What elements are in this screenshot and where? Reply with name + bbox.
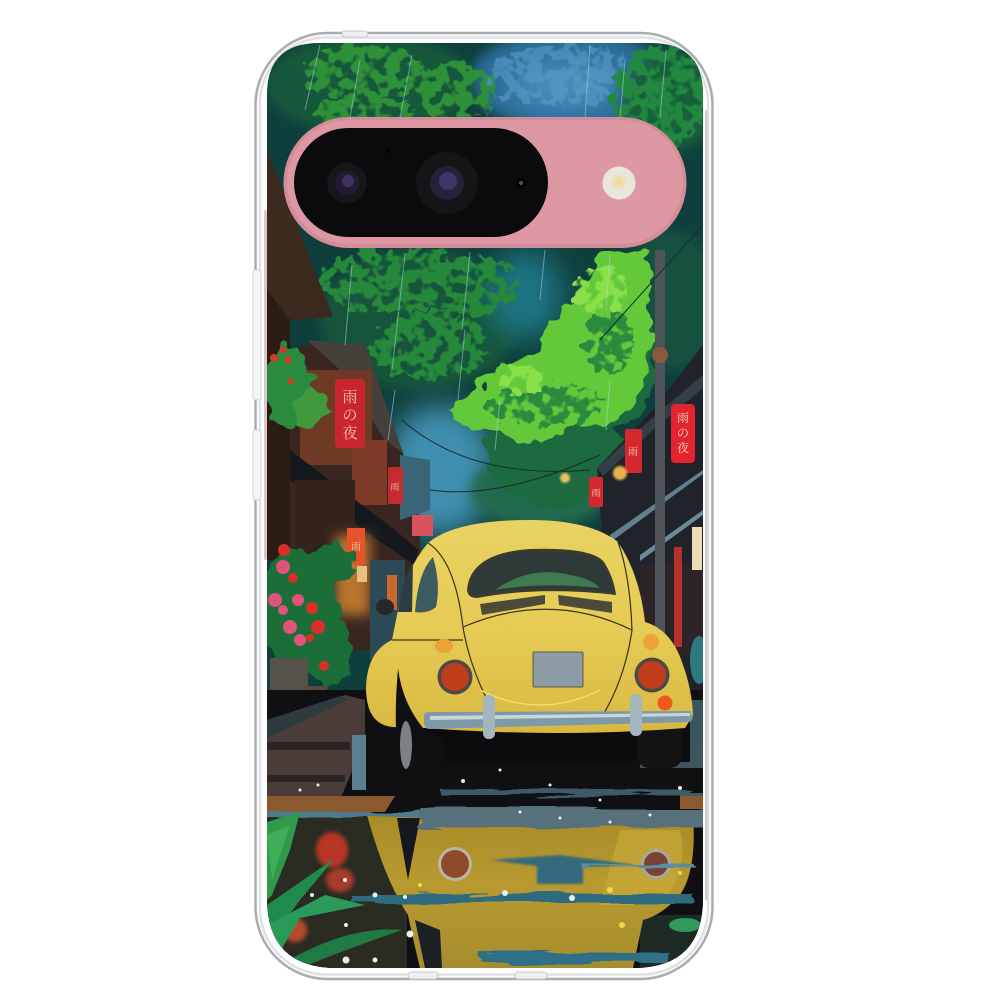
artwork	[262, 30, 720, 970]
pole lamp	[652, 347, 668, 363]
phone case	[253, 30, 720, 979]
bumper	[424, 711, 693, 729]
camera bar	[284, 117, 686, 248]
black lens pill	[294, 128, 548, 237]
distant blue tree texture	[485, 45, 645, 105]
reflection of car	[367, 815, 694, 968]
puddle streaks	[440, 746, 640, 760]
case pink edge	[264, 210, 267, 560]
rear window frame	[467, 549, 616, 598]
lantern right big: 夜	[677, 440, 689, 455]
lantern orange: 雨	[351, 541, 361, 553]
dark lower tree	[481, 326, 655, 510]
case top tab	[342, 31, 368, 37]
reflected taillight left	[438, 847, 472, 881]
right buildings	[560, 250, 708, 700]
lantern large left: の	[342, 408, 358, 424]
car	[366, 520, 693, 770]
dark wheel reflection	[397, 818, 420, 880]
foreground grass	[267, 812, 402, 968]
front side window	[398, 563, 413, 612]
wheel arch and left tyre	[396, 668, 443, 770]
case right edge	[705, 110, 708, 900]
sensor dots	[386, 149, 526, 188]
window reflection	[495, 572, 600, 590]
hanging white sign	[692, 527, 702, 570]
sidewalk	[267, 695, 365, 800]
lantern right big: の	[677, 426, 689, 440]
case left buttons	[253, 270, 261, 500]
left lanterns	[335, 379, 433, 582]
tail light left	[438, 660, 472, 694]
under-car shadow	[400, 728, 690, 762]
car body	[366, 520, 693, 733]
lens left	[327, 163, 367, 203]
left vine	[263, 345, 330, 426]
mid foliage	[320, 248, 520, 379]
wooden planter	[270, 658, 308, 690]
case inner bevel	[260, 38, 708, 974]
lens right	[416, 152, 478, 214]
lantern large left: 雨	[342, 389, 358, 406]
case bottom tabs	[408, 972, 547, 979]
lantern large left: 夜	[342, 425, 358, 442]
lantern small left	[388, 467, 403, 504]
red sign	[674, 547, 682, 647]
reflection background	[267, 815, 703, 968]
reflected taillight right	[641, 849, 671, 879]
lantern small left: 雨	[390, 482, 400, 492]
water droplets	[298, 768, 682, 964]
indicators	[435, 639, 453, 653]
lantern far left	[412, 515, 433, 536]
lantern orange	[347, 528, 365, 564]
teal plant	[690, 636, 703, 684]
small flower pot	[305, 686, 328, 690]
bright green tree	[445, 250, 650, 445]
bumper highlight	[430, 713, 690, 720]
lantern large left	[335, 379, 365, 448]
left roof building	[267, 150, 430, 660]
lantern right small: 雨	[591, 488, 601, 498]
case outer transparent shell	[256, 33, 712, 979]
engine vents	[480, 595, 612, 615]
overhead wires	[402, 225, 703, 492]
pink camera housing	[284, 117, 686, 248]
top-right foliage	[612, 45, 712, 145]
reflected plate	[490, 855, 637, 884]
tail light right	[634, 658, 670, 692]
trunk highlight	[480, 690, 600, 705]
flash	[602, 166, 636, 200]
top-left foliage	[305, 44, 497, 126]
lantern right mid	[625, 429, 642, 473]
lantern right mid: 雨	[628, 446, 638, 458]
left hub	[400, 721, 412, 769]
body seams	[392, 542, 632, 720]
water bands	[267, 790, 703, 963]
reflected drops	[418, 871, 682, 928]
orange reflector	[658, 696, 672, 710]
rain	[305, 45, 666, 450]
background base	[265, 30, 720, 968]
left flowers	[262, 544, 352, 710]
lantern right big: 雨	[677, 411, 689, 425]
rear window glass	[470, 552, 613, 595]
license plate	[533, 652, 583, 687]
ground	[267, 690, 703, 970]
lantern right big	[671, 404, 695, 463]
utility pole	[655, 250, 665, 640]
side mirror	[376, 599, 394, 615]
lantern right small	[589, 477, 603, 507]
quarter window	[415, 557, 438, 612]
bumper guards	[483, 695, 495, 739]
pink camera face	[287, 120, 683, 244]
right tyre	[637, 720, 682, 768]
